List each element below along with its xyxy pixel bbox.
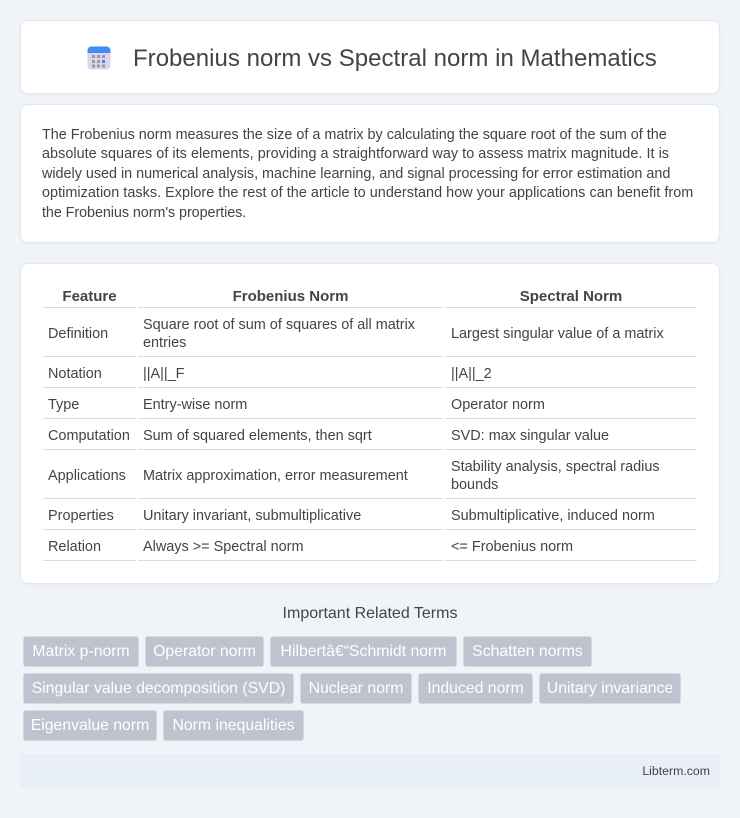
- row: Notation: [48, 366, 492, 382]
- tag: [539, 673, 681, 704]
- row: Definition: Square root of sum of squares of all matrix: [143, 317, 415, 333]
- tag list: related terms: [23, 636, 681, 741]
- tag: Singular value decomposition (SVD): [32, 680, 285, 697]
- tag: [23, 710, 157, 741]
- row: Definition: entries: [143, 335, 186, 351]
- tag: Unitary invariance: [547, 680, 673, 697]
- tag: Schatten norms: [472, 643, 583, 660]
- row: Properties: [48, 508, 655, 524]
- row: Computation: Sum of squared elements, then sqrt: [143, 428, 372, 444]
- row: Relation: Always >= Spectral norm: [143, 539, 303, 555]
- table header: Frobenius Norm: Frobenius Norm: [233, 288, 348, 305]
- row: Relation: Relation: [48, 539, 101, 555]
- table header: Feature: Feature: [62, 288, 117, 305]
- icon: calendar grid: [88, 46, 110, 70]
- text block: introduction paragraph: absolute squares of its elements, providing a straightforward way to assess matrix magnitude. It is: [42, 146, 669, 162]
- row: Notation: ||A||_2: [451, 366, 492, 382]
- row: Computation: SVD: max singular value: [451, 428, 609, 444]
- row: Relation: [48, 539, 573, 555]
- footer credit: Libterm.com: [642, 764, 710, 778]
- row: Properties: Properties: [48, 508, 114, 524]
- text block: introduction paragraph: The Frobenius norm measures the size of a matrix by calculating the square root of the sum of the: [42, 127, 667, 143]
- row: Definition: Largest singular value of a matrix: [451, 326, 664, 342]
- panel: title header: [20, 20, 720, 94]
- row: Notation: ||A||_F: [143, 366, 184, 382]
- tag: Norm inequalities: [172, 717, 295, 734]
- tag: Operator norm: [153, 643, 256, 660]
- row: Relation: <= Frobenius norm: [451, 539, 573, 555]
- panel: introduction: [20, 104, 720, 243]
- tag: [300, 673, 412, 704]
- tag: Induced norm: [427, 680, 524, 697]
- row: Type: [48, 397, 545, 413]
- row: Notation: Notation: [48, 366, 102, 382]
- row: Applications: Matrix approximation, error measurement: [143, 468, 408, 484]
- tag: [23, 636, 139, 667]
- row: Applications: Applications: [48, 468, 126, 484]
- row: Properties: Submultiplicative, induced norm: [451, 508, 655, 524]
- tag: [163, 710, 304, 741]
- tag: Nuclear norm: [309, 680, 403, 697]
- row: Computation: [48, 428, 609, 444]
- text block: introduction paragraph: the Frobenius norm's properties.: [42, 205, 246, 221]
- tag: [145, 636, 264, 667]
- text block: introduction paragraph: widely used in numerical analysis, machine learning, and signal processing for error estimation and: [42, 166, 670, 182]
- row: Applications: Stability analysis, spectral radius: [451, 459, 660, 475]
- row: Definition: Definition: [48, 326, 108, 342]
- row: Applications: [48, 459, 660, 493]
- row: Type: Entry-wise norm: [143, 397, 247, 413]
- tag: [23, 673, 294, 704]
- text block: introduction paragraph: optimization tasks. Explore the rest of the article to understand how your applications can benefit from: [42, 185, 693, 201]
- text block: introduction paragraph: [42, 127, 693, 221]
- panel: comparison table: [20, 263, 720, 584]
- tag: [270, 636, 457, 667]
- table header: Spectral Norm: Spectral Norm: [520, 288, 622, 305]
- tag: [463, 636, 592, 667]
- tag: [418, 673, 533, 704]
- row: Type: Operator norm: [451, 397, 545, 413]
- tag: Eigenvalue norm: [31, 717, 149, 734]
- footer bar: [20, 754, 720, 788]
- title: Frobenius norm vs Spectral norm in Mathematics: [133, 45, 657, 72]
- heading: related terms: Important Related Terms: [283, 605, 457, 622]
- tag: Matrix p-norm: [32, 643, 130, 660]
- row: Properties: Unitary invariant, submultiplicative: [143, 508, 361, 524]
- row: Computation: Computation: [48, 428, 130, 444]
- row: Type: Type: [48, 397, 79, 413]
- tag: Hilbertâ€“Schmidt norm: [281, 643, 446, 660]
- row: Definition: [48, 317, 664, 351]
- row: Applications: bounds: [451, 477, 498, 493]
